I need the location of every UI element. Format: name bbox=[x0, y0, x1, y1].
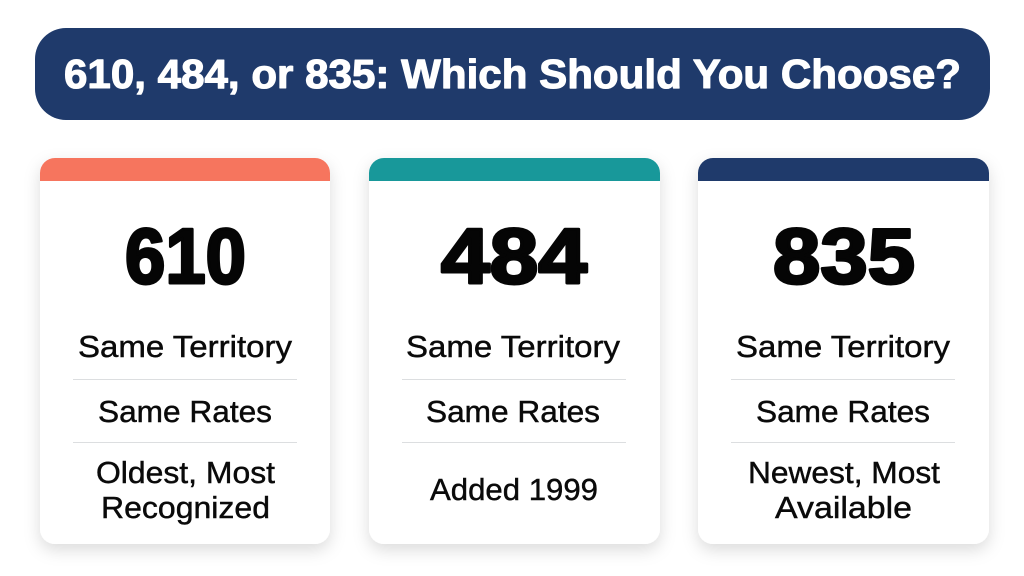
panel: 835 bbox=[698, 158, 989, 544]
distinction label: Added 1999 bbox=[430, 472, 598, 507]
distinction label bbox=[748, 455, 940, 525]
title banner bbox=[35, 28, 990, 120]
distinction label: Available bbox=[775, 490, 912, 525]
distinction label: Recognized bbox=[101, 490, 270, 525]
card header: teal bbox=[369, 158, 660, 181]
number 835: 835 bbox=[773, 212, 915, 300]
panel: 484 bbox=[369, 158, 660, 544]
distinction label: Newest, Most bbox=[748, 455, 940, 490]
rates label: Same Rates bbox=[98, 394, 272, 429]
rates label: Same Rates bbox=[426, 394, 600, 429]
rates label: Same Rates bbox=[756, 394, 930, 429]
number 610: 610 bbox=[125, 212, 246, 300]
distinction label bbox=[96, 455, 275, 525]
title: 610, 484, or 835: Which Should You Choose? bbox=[64, 51, 961, 97]
territory label: Same Territory bbox=[736, 329, 951, 364]
card header: coral bbox=[40, 158, 330, 181]
territory label: Same Territory bbox=[78, 329, 293, 364]
panel: 610 bbox=[40, 158, 330, 544]
distinction label: Oldest, Most bbox=[96, 455, 275, 490]
number 484: 484 bbox=[441, 212, 587, 300]
card header: navy bbox=[698, 158, 989, 181]
territory label: Same Territory bbox=[406, 329, 621, 364]
